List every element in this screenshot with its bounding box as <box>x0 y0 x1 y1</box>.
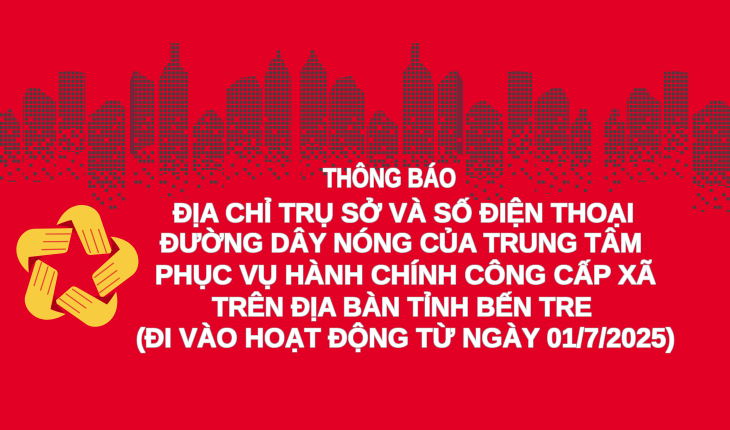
building 16 <box>507 71 532 180</box>
hand 1 <box>56 205 112 255</box>
title line 1: THÔNG BÁO <box>323 163 456 193</box>
building 3 <box>59 71 85 180</box>
building 10 <box>300 50 327 180</box>
building 2 <box>23 87 56 182</box>
building 20 <box>627 87 661 182</box>
title line 6: (ĐI VÀO HOẠT ĐỘNG TỪ NGÀY 01/7/2025) <box>136 323 675 353</box>
irregular window gaps <box>0 118 730 162</box>
building 12 <box>367 110 399 170</box>
hand 2 <box>82 230 147 299</box>
title line 3: ĐƯỜNG DÂY NÓNG CỦA TRUNG TÂM <box>160 228 642 258</box>
hand 5 <box>10 213 75 282</box>
title text <box>136 163 675 353</box>
building 1 <box>0 108 20 182</box>
hand 3 <box>53 267 128 341</box>
title line 5: TRÊN ĐỊA BÀN TỈNH BẾN TRE <box>212 292 592 322</box>
building 18 <box>571 108 592 192</box>
building 4 <box>88 100 126 210</box>
building 6 <box>158 43 188 198</box>
skyline of dissolving pixel buildings <box>0 43 730 212</box>
building 7 <box>192 110 224 188</box>
building 21 <box>664 71 689 178</box>
building 8 <box>226 76 262 180</box>
building 15 <box>465 100 504 200</box>
building 11 <box>329 76 365 172</box>
title line 4: PHỤC VỤ HÀNH CHÍNH CÔNG CẤP XÃ <box>155 260 656 290</box>
hand 4 <box>9 257 83 330</box>
title line 2: ĐỊA CHỈ TRỤ SỞ VÀ SỐ ĐIỆN THOẠI <box>173 198 634 228</box>
building 22 <box>692 100 730 212</box>
building 14 <box>438 70 463 164</box>
logo: five hands forming a star <box>9 205 147 341</box>
building 17 <box>535 87 569 194</box>
building 19 <box>604 108 625 192</box>
building 9 <box>265 50 291 180</box>
building 13 <box>403 43 434 168</box>
building 5 <box>130 70 154 188</box>
